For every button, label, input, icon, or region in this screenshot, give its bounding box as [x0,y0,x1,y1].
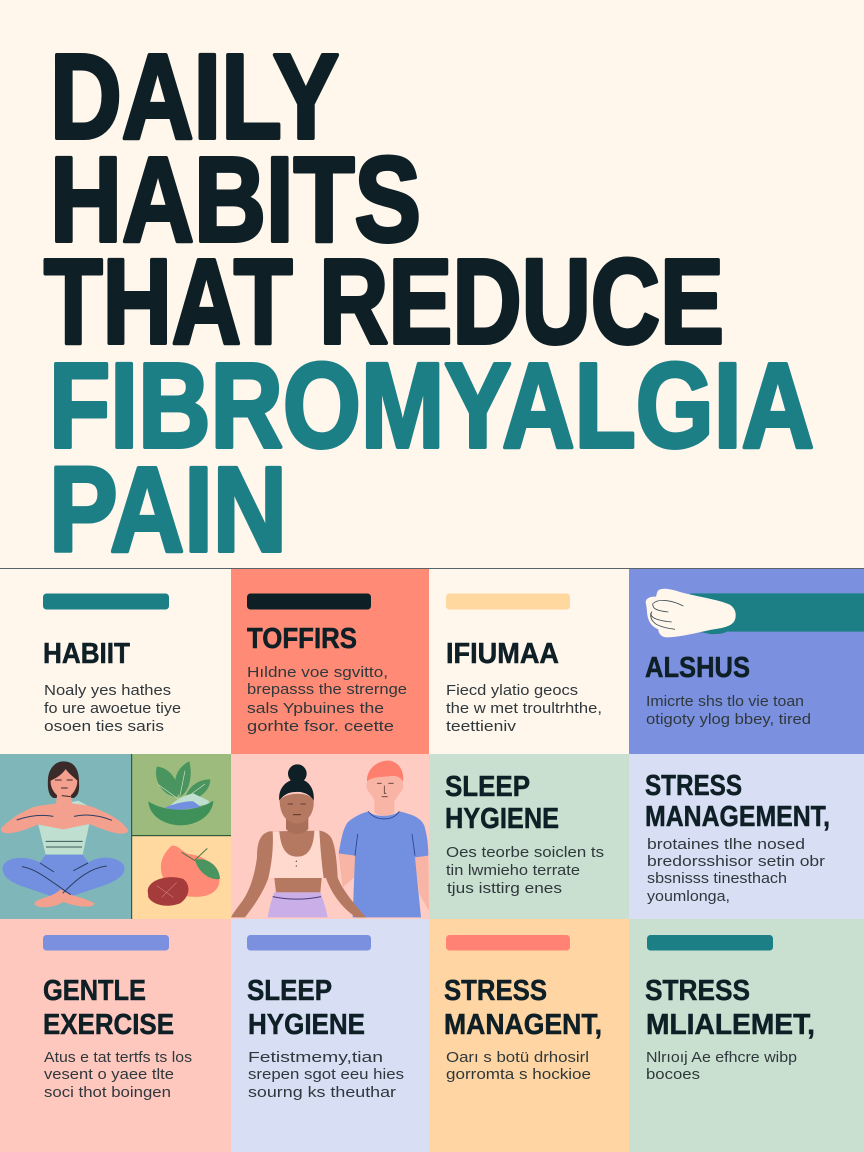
panel: toffirs: gorhte fsor. ceette [247,718,394,735]
panel: ifiumaa [429,569,629,754]
panel: ifiumaa: Fiecd ylatio geocs [446,682,578,699]
title: DAILY [50,29,339,164]
panel: stress managent [429,919,629,1152]
panel: gentle exercise: EXERCISE [43,1009,174,1041]
panel: stress management: MANAGEMENT, [645,801,830,833]
panel: stress management: sbsnisss tinesthach [647,870,787,887]
panel: toffirs: sals Ypbuines the [247,700,384,717]
panel: sleep hygiene lower [231,919,429,1152]
icon: hand and teal sleeve [646,589,864,637]
panel: stress management: brotaines tlhe nosed [647,836,805,853]
panel: stress management [629,754,864,919]
panel: sleep hygiene: HYGIENE [445,803,559,835]
panel: alshus: Imicrte shs tlo vie toan [646,693,804,710]
panel: sleep hygiene lower: SLEEP [247,975,332,1007]
panel: herbs in bowl [132,754,231,835]
woman figure [231,764,366,917]
panel: ifiumaa: teettieniv [446,718,517,735]
panel: stress mlialemet: bocoes [646,1066,700,1083]
panel: stress managent: MANAGENT, [444,1009,602,1041]
panel: ifiumaa: IFIUMAA [446,638,559,670]
panel: gentle exercise: Atus e tat tertfs ts los [44,1049,192,1066]
panel: alshus: otigoty ylog bbey, tired [646,711,811,728]
title: HABITS [50,132,421,267]
panel: stress mlialemet [629,919,864,1152]
panel: sleep hygiene: tjus isttirg enes [447,880,562,897]
panel: stress management: youmlonga, [647,888,730,905]
panel: toffirs: Hıldne voe sgvitto, [247,664,388,681]
panel: alshus: ALSHUS [645,652,750,684]
panel: stress managent: gorromta s hockioe [446,1066,591,1083]
panel: sleep hygiene [429,754,629,919]
panel: fruit [132,836,231,919]
panel: habit [0,569,231,754]
panel: habit: osoen ties saris [44,718,164,735]
panel: toffirs: TOFFIRS [247,623,357,655]
panel: sleep hygiene: Oes teorbe soiclen ts [446,844,604,861]
panel: stress management: STRESS [645,770,742,802]
panel: sleep hygiene lower: srepen sgot eeu hies [248,1066,404,1083]
panel: sleep hygiene: tin lwmieho terrate [446,862,580,879]
panel: gentle exercise: GENTLE [43,975,146,1007]
panel: habit: fo ure awoetue tiye [44,700,181,717]
panel: gentle exercise: vesent o yaee tlte [44,1066,174,1083]
panel: stress managent: STRESS [444,975,547,1007]
panel: toffirs: brepasss the strernge [247,681,407,698]
panel: stress mlialemet: STRESS [645,975,750,1007]
panel: stress management: bredorsshisor setin obr [647,853,825,870]
panel: gentle exercise [0,919,231,1152]
panel: sleep hygiene lower: Fetistmemy,tian [248,1049,383,1066]
panel: stress mlialemet: MLIALEMET, [646,1009,815,1041]
panel: stress mlialemet: Nlrıoıj Ae efhcre wibp [646,1049,797,1066]
panel: alshus [629,569,864,754]
panel: sleep hygiene lower: HYGIENE [248,1009,365,1041]
panel: sleep hygiene lower: sourng ks theuthar [248,1084,396,1101]
panel: gentle exercise: soci thot boingen [44,1084,171,1101]
title [44,29,814,577]
panel: toffirs [231,569,429,754]
man figure [338,761,429,917]
panel: sleep hygiene: SLEEP [445,771,530,803]
title: PAIN [49,442,287,577]
panel: stress managent: Oarı s botü drhosirl [446,1049,589,1066]
panel: habit: Noaly yes hathes [44,682,171,699]
panel: two people [231,754,429,919]
panel: ifiumaa: the w met troultrhthe, [446,700,602,717]
panel: habit: HABIIT [43,638,131,670]
panel: yoga figure [0,754,132,919]
